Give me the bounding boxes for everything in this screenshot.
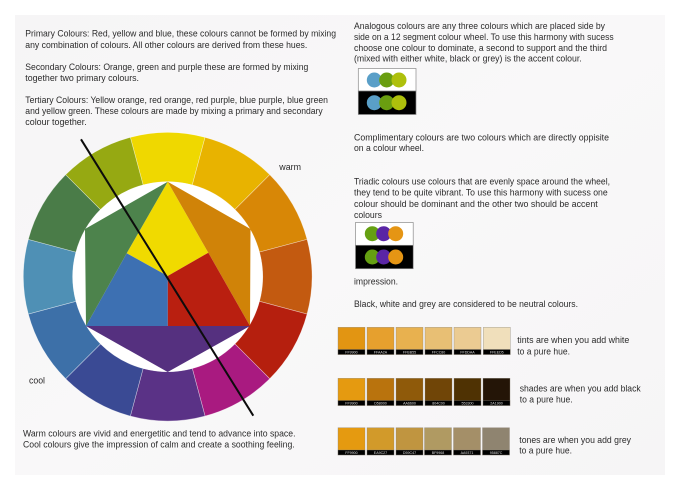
text block: complimentary colours: on a colour wheel. <box>354 143 424 153</box>
wheel ring: twelve segments <box>23 132 312 421</box>
text: shades description: to a pure hue. <box>520 395 573 405</box>
text block: warm and cool colours: Warm colours are vivid and energetitic and tend to advance into space. <box>23 428 296 438</box>
label: warm: warm <box>278 162 301 172</box>
swatch row: tones: AA9371 <box>461 451 473 455</box>
swatch row: tints: FFAA2A <box>374 350 388 354</box>
text block: triadic colours: colours <box>354 210 382 220</box>
text block: primary, secondary and tertiary colours <box>25 28 336 127</box>
swatch row: tones: BF9968 <box>432 451 444 455</box>
text block: analogous colours: (mixed with either white, black or grey) is the accent colour. <box>354 54 582 64</box>
text: tones description <box>519 435 631 456</box>
text block: primary, secondary and tertiary colours: and yellow green. These colours are made by mixing a primary and secondary <box>25 106 323 116</box>
swatch row: tones: EA9C27 <box>374 451 387 455</box>
text: shades description: shades are when you add black <box>520 383 641 393</box>
text: tones description: to a pure hue. <box>519 446 572 456</box>
swatch row: shades: 553300 <box>462 402 474 406</box>
text block: analogous colours: side on a 12 segment colour wheel. To use this harmony with sucess <box>354 32 614 42</box>
text block: primary, secondary and tertiary colours: Secondary Colours: Orange, green and purple these are formed by mixing <box>25 62 308 72</box>
text block: warm and cool colours <box>23 428 296 450</box>
swatch row: tones <box>338 428 510 455</box>
text block: triadic colours: they tend to be quite vibrant. To use this harmony with sucess one <box>354 188 608 198</box>
text block: primary, secondary and tertiary colours: any combination of colours. All other colours are derived from these hues. <box>25 40 307 50</box>
swatch row: shades: 804C00 <box>432 402 445 406</box>
swatch row: shades <box>338 378 510 406</box>
swatch row: tints: FFDDAA <box>460 350 475 354</box>
text: tints description <box>517 335 629 356</box>
text block: triadic colours: Triadic colours use colours that are evenly space around the wheel, <box>354 177 610 187</box>
text: impression: impression. <box>354 277 398 287</box>
swatch row: tints: FFCC80 <box>432 350 445 354</box>
text block: primary, secondary and tertiary colours: colour together. <box>25 117 87 127</box>
swatch row: tints <box>338 327 510 355</box>
text block: warm and cool colours: Cool colours give the impression of calm and create a soothing feeling. <box>23 440 295 450</box>
text: tones description: tones are when you add grey <box>519 435 631 445</box>
text block: analogous colours: Analogous colours are any three colours which are placed side by <box>354 21 605 31</box>
text: tints description: to a pure hue. <box>517 346 570 356</box>
text block: analogous colours <box>354 21 614 64</box>
text block: triadic colours: colour should be dominant and the other two should be accent <box>354 199 598 209</box>
swatch row: tones: D59C47 <box>403 451 416 455</box>
swatch row: shades: FF9900 <box>345 402 358 406</box>
text block: complimentary colours: Complimentary colours are two colours which are directly oppisite <box>354 132 609 142</box>
text block: primary, secondary and tertiary colours: together two primary colours. <box>25 73 139 83</box>
text: neutral colours: Black, white and grey are considered to be neutral colours. <box>354 299 578 309</box>
swatch: triadic harmony circles <box>356 222 413 269</box>
diagonal warm/cool divider line <box>81 139 253 416</box>
inner figure: primary and secondary shapes <box>85 182 250 372</box>
swatch row: shades: 2A1900 <box>490 402 503 406</box>
swatch: analogous harmony circles <box>358 68 416 114</box>
text block: primary, secondary and tertiary colours: Primary Colours: Red, yellow and blue, these colours cannot be formed by mixing <box>25 28 336 38</box>
swatch row: shades: AA6600 <box>403 402 416 406</box>
label: cool: cool <box>29 376 45 386</box>
swatch row: tones: FF9900 <box>345 451 358 455</box>
text: shades description <box>520 383 641 405</box>
swatch row: tones: 95887C <box>490 451 503 455</box>
white centre disc <box>73 182 263 372</box>
text: tints description: tints are when you add white <box>517 335 629 345</box>
text block: primary, secondary and tertiary colours: Tertiary Colours: Yellow orange, red orange, red purple, blue purple, blue green <box>25 95 328 105</box>
swatch row: tints: FFBB55 <box>403 350 416 354</box>
swatch row: tints: FFEED5 <box>490 350 504 354</box>
colour wheel <box>23 132 312 421</box>
text block: triadic colours <box>354 177 610 220</box>
text block: analogous colours: choose one colour to dominate, a second to support and the third <box>354 43 607 53</box>
swatch row: tints: FF9900 <box>345 350 358 354</box>
swatch row: shades: D58000 <box>374 402 387 406</box>
text block: complimentary colours <box>354 132 609 153</box>
